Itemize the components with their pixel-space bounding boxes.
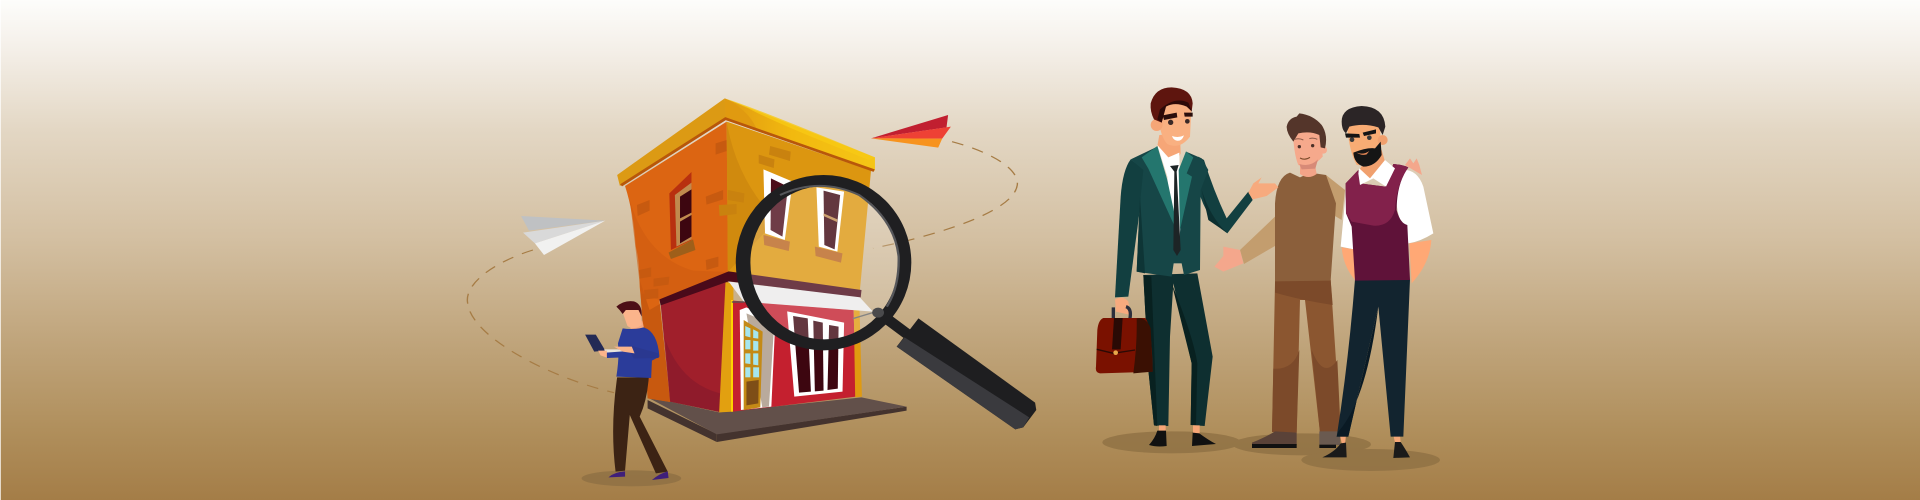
ground shadows [1102, 431, 1440, 471]
business people group [1096, 87, 1440, 471]
ankles [1159, 425, 1166, 433]
laptop [585, 335, 605, 352]
shoes [1149, 431, 1167, 446]
face [1293, 127, 1323, 167]
torso [1275, 173, 1336, 281]
lower left wall [661, 282, 728, 412]
man in plum vest [1322, 106, 1433, 458]
ground shadow [582, 470, 681, 486]
neck [1359, 150, 1385, 178]
ankles [1340, 435, 1346, 445]
magnifying glass [736, 175, 1036, 429]
shoes [608, 471, 625, 477]
trousers [1272, 280, 1341, 433]
neck and head [629, 321, 644, 331]
shirt sleeves [1396, 170, 1433, 243]
right hand [1248, 177, 1278, 199]
left sleeve [1115, 159, 1145, 297]
dashed flight path [467, 142, 1017, 393]
roof [617, 98, 727, 186]
neck [1300, 165, 1317, 177]
trousers [613, 377, 668, 473]
eyes and brows [1345, 129, 1376, 138]
base slab [648, 397, 907, 442]
house [617, 98, 875, 412]
rim knob [872, 308, 884, 318]
neck [1157, 133, 1181, 165]
upper right wall [727, 122, 871, 290]
hair [1151, 87, 1193, 123]
lens glass [749, 185, 899, 340]
floor band [659, 271, 862, 305]
house and magnifier scene [467, 98, 1036, 486]
awning [729, 282, 873, 312]
upper left window [669, 172, 695, 259]
right sleeve [1198, 157, 1253, 233]
person with laptop [582, 301, 681, 486]
paper plane: red [871, 115, 951, 148]
jacket body [1131, 147, 1208, 277]
trousers [1337, 279, 1410, 437]
lens rim [736, 175, 911, 350]
far hand on shoulder [1405, 158, 1422, 175]
upper right windows [763, 169, 844, 263]
tie [1170, 165, 1181, 256]
hair [616, 301, 642, 317]
storefront window [787, 311, 844, 397]
handle neck [885, 317, 909, 335]
smile [1172, 135, 1184, 141]
lower front [719, 282, 733, 412]
handle grip [897, 318, 1036, 429]
shirt [1157, 145, 1182, 263]
head [1156, 103, 1192, 146]
shoes [1252, 431, 1297, 445]
arms [1409, 240, 1431, 283]
collar [1358, 160, 1395, 187]
vest [1346, 164, 1410, 281]
shoes [1322, 443, 1347, 457]
bricks [637, 140, 727, 299]
face [1347, 120, 1381, 165]
sweater [616, 327, 659, 378]
trousers [1143, 273, 1213, 426]
brows and eyes [1163, 113, 1193, 120]
hand on bag [1115, 298, 1131, 315]
hair [1287, 113, 1326, 148]
man in brown sweater [1214, 113, 1422, 448]
upper left wall [625, 122, 729, 402]
beard [1353, 142, 1382, 167]
briefcase [1096, 307, 1153, 373]
paper plane: white [521, 216, 605, 255]
storefront door [740, 307, 775, 410]
arms [1240, 217, 1277, 264]
hair [1342, 106, 1385, 135]
forearm and hands [606, 351, 634, 358]
lapels [1142, 146, 1179, 237]
man in green suit [1096, 87, 1278, 446]
